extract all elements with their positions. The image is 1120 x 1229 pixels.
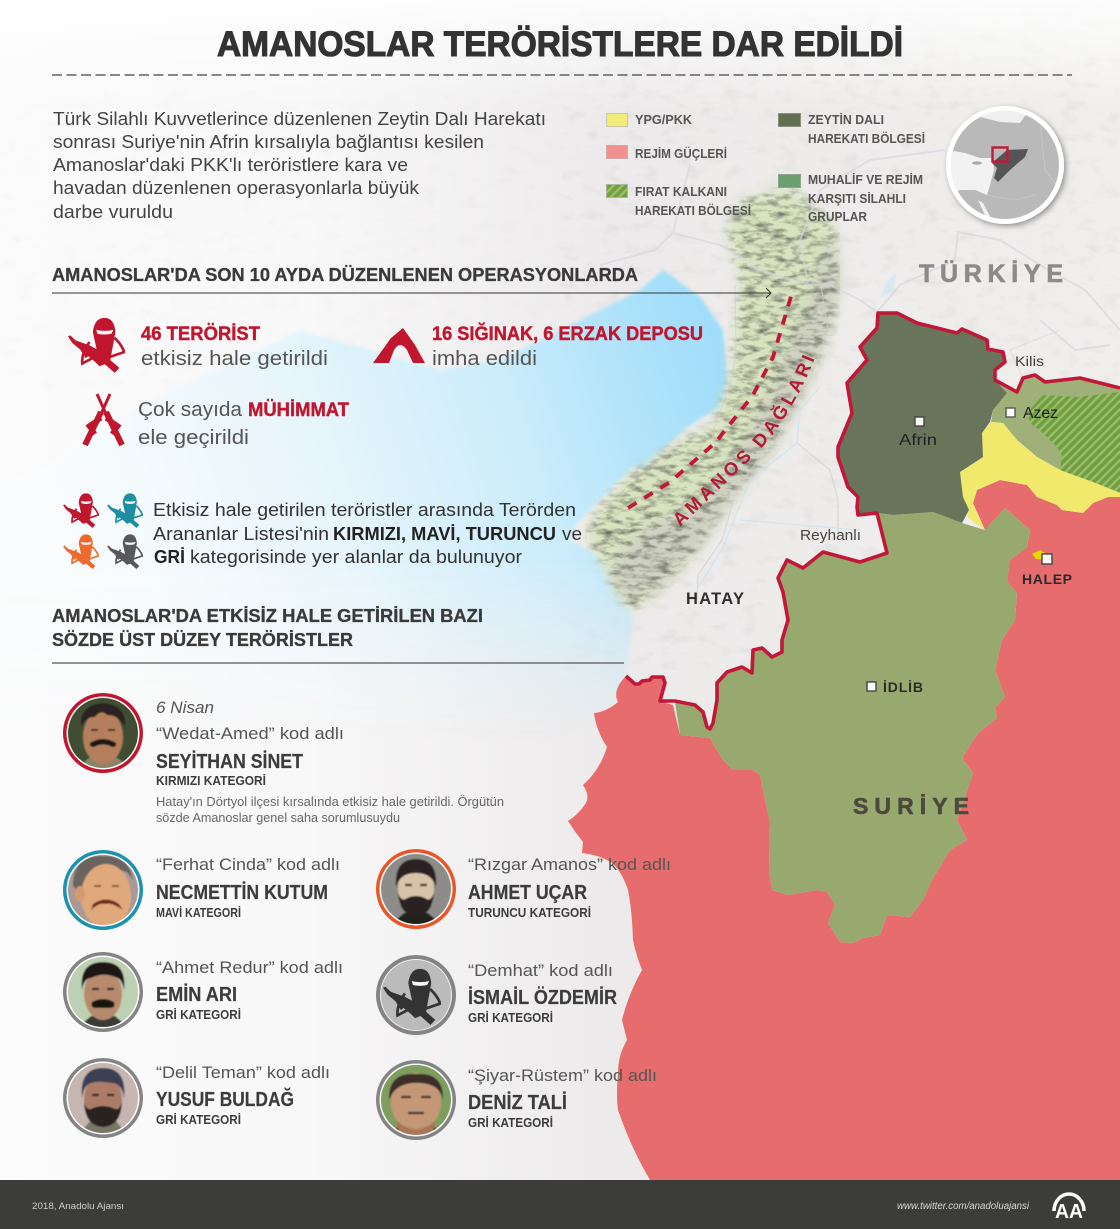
inset locator globe — [945, 105, 1065, 225]
wanted list note: kategorisinde yer alanlar da bulunuyor — [190, 547, 522, 567]
wanted list note: ve — [562, 524, 582, 544]
person: Necmettin Kutum: MAVİ KATEGORİ — [156, 905, 241, 920]
icons: wanted list categories — [63, 493, 143, 569]
person: İsmail Özdemir: GRİ KATEGORİ — [468, 1010, 553, 1025]
intro text: darbe vuruldu — [53, 202, 173, 222]
label: Suriye: SURİYE — [853, 793, 969, 819]
person: Yusuf Buldağ: “Delil Teman” kod adlı — [156, 1063, 330, 1082]
region: opposition groups — [675, 508, 1030, 943]
small yellow area near Aleppo — [1032, 550, 1045, 560]
portrait placeholder — [376, 955, 456, 1035]
portrait — [63, 850, 143, 930]
portrait — [376, 849, 456, 929]
heading: operations in the last 10 months — [52, 265, 771, 298]
person: Emin Arı: EMİN ARI — [156, 983, 237, 1006]
label: Reyhanlı: Reyhanlı — [800, 528, 861, 544]
legend: Euphrates Shield: FIRAT KALKANI — [635, 184, 727, 199]
person: Deniz Tali: “Şiyar-Rüstem” kod adlı — [468, 1066, 657, 1085]
person: Seyithan Sinet: “Wedat-Amed” kod adlı — [156, 724, 344, 743]
map labels — [674, 259, 1072, 819]
heading: senior terrorists — [52, 606, 624, 663]
icon: armed fighter — [68, 318, 124, 373]
person: Ahmet Uçar: “Rızgar Amanos” kod adlı — [468, 855, 671, 874]
person: Emin Arı: GRİ KATEGORİ — [156, 1007, 241, 1022]
label: Halep: HALEP — [1022, 571, 1072, 587]
stat: 16 shelters: 16 SIĞINAK, 6 ERZAK DEPOSU — [432, 323, 703, 345]
person: Seyithan Sinet: SEYİTHAN SİNET — [156, 750, 303, 773]
legend: opposition groups — [778, 172, 923, 224]
icon: crossed rifles — [85, 394, 122, 445]
legend: opposition groups: MUHALİF VE REJİM — [808, 172, 923, 187]
person: Necmettin Kutum: “Ferhat Cinda” kod adlı — [156, 855, 340, 874]
legend: regime forces — [606, 146, 727, 161]
person: Necmettin Kutum — [63, 850, 340, 930]
title: AMANOSLAR TERÖRİSTLERE DAR EDİLDİ — [217, 25, 903, 64]
region: Euphrates Shield hatch — [1027, 392, 1120, 492]
stat: ammunition: ele geçirildi — [138, 427, 249, 449]
map regions — [568, 293, 1120, 1180]
stat: 16 shelters — [373, 323, 703, 370]
label: Amanos Dağları — [680, 333, 824, 527]
heading: senior terrorists: SÖZDE ÜST DÜZEY TERÖRİSTLER — [52, 630, 353, 650]
legend: regime forces: REJİM GÜÇLERİ — [635, 146, 727, 161]
person: Ahmet Uçar: AHMET UÇAR — [468, 882, 587, 904]
map labels: AMANOS DAĞLARI — [674, 354, 814, 526]
person: Deniz Tali — [376, 1060, 657, 1140]
person: Yusuf Buldağ: GRİ KATEGORİ — [156, 1112, 241, 1127]
label: Afrin: Afrin — [899, 432, 937, 449]
heading: senior terrorists: AMANOSLAR'DA ETKİSİZ HALE GETİRİLEN BAZI — [52, 606, 483, 626]
label: Azez: Azez — [1023, 405, 1058, 422]
region: Olive Branch — [838, 313, 1007, 523]
portrait — [63, 693, 143, 773]
person: Seyithan Sinet: Hatay'ın Dörtyol ilçesi kırsalında etkisiz hale getirildi. Örgütün — [156, 795, 504, 809]
person: Deniz Tali: GRİ KATEGORİ — [468, 1115, 553, 1130]
person: Seyithan Sinet: KIRMIZI KATEGORİ — [156, 773, 266, 788]
person: Seyithan Sinet: 6 Nisan — [156, 698, 214, 717]
legend — [606, 112, 925, 224]
legend: Olive Branch: HAREKATI BÖLGESİ — [808, 131, 925, 146]
legend: opposition groups: GRUPLAR — [808, 209, 868, 224]
stat: 46 terrorists: etkisiz hale getirildi — [141, 348, 328, 370]
region: north opposition — [991, 375, 1120, 495]
person: İsmail Özdemir: “Demhat” kod adlı — [468, 961, 613, 980]
wanted list note: KIRMIZI, MAVİ, TURUNCU — [333, 524, 556, 544]
intro text — [53, 109, 546, 222]
footer bar: www.twitter.com/anadoluajansi — [897, 1201, 1030, 1212]
stat: 16 shelters: imha edildi — [432, 348, 537, 370]
person: Necmettin Kutum: NECMETTİN KUTUM — [156, 881, 328, 904]
person: İsmail Özdemir — [376, 955, 618, 1035]
stat: ammunition: Çok sayıda — [138, 399, 243, 421]
person: Yusuf Buldağ — [63, 1058, 330, 1138]
stat: 46 terrorists — [68, 318, 328, 373]
intro text: Türk Silahlı Kuvvetlerince düzenlenen Zeytin Dalı Harekatı — [53, 109, 546, 129]
legend: Euphrates Shield — [606, 184, 751, 218]
label: Halep — [1022, 554, 1072, 587]
icon: cave — [373, 328, 425, 363]
legend: Olive Branch: ZEYTİN DALI — [808, 112, 884, 127]
terrain: Amanos mountains — [585, 187, 840, 610]
portrait — [376, 1060, 456, 1140]
person: Seyithan Sinet — [63, 693, 504, 825]
person: Ahmet Uçar: TURUNCU KATEGORİ — [468, 905, 591, 920]
wanted list note: GRİ — [154, 547, 185, 567]
label: Afrin — [899, 417, 937, 449]
intro text: havadan düzenlenen operasyonlarla büyük — [53, 178, 420, 198]
label: Türkiye: TÜRKİYE — [919, 259, 1063, 288]
person: İsmail Özdemir: İSMAİL ÖZDEMİR — [468, 986, 618, 1009]
legend: YPG/PKK: YPG/PKK — [635, 112, 693, 127]
logo: Anadolu Agency: AA — [1055, 1201, 1083, 1223]
portrait — [63, 952, 143, 1032]
person: Deniz Tali: DENİZ TALİ — [468, 1091, 567, 1114]
label: Kilis: Kilis — [1015, 353, 1044, 369]
person: Emin Arı: “Ahmet Redur” kod adlı — [156, 958, 343, 977]
wanted list note: Arananlar Listesi'nin — [153, 524, 329, 544]
legend: Olive Branch — [778, 112, 925, 146]
label: Hatay: HATAY — [686, 590, 744, 608]
region: regime forces — [568, 480, 1120, 1180]
stat: ammunition — [85, 394, 349, 449]
label: İdlib: İDLİB — [883, 679, 923, 695]
heading: operations in the last 10 months: AMANOSLAR'DA SON 10 AYDA DÜZENLENEN OPERASYONLARDA — [52, 265, 638, 285]
label: Azez — [1006, 405, 1058, 422]
person: Emin Arı — [63, 952, 343, 1032]
wanted list note — [63, 493, 582, 569]
footer bar — [0, 1180, 1120, 1229]
dashed line: Amanos mountains — [628, 293, 792, 508]
stat: 46 terrorists: 46 TERÖRİST — [141, 324, 260, 345]
person: Ahmet Uçar — [376, 849, 671, 929]
legend: YPG/PKK — [606, 112, 693, 127]
legend: Euphrates Shield: HAREKATI BÖLGESİ — [635, 203, 751, 218]
portrait — [63, 1058, 143, 1138]
footer bar: 2018, Anadolu Ajansı — [32, 1201, 124, 1212]
intro text: Amanoslar'daki PKK'lı teröristlere kara ve — [53, 155, 408, 175]
person: Yusuf Buldağ: YUSUF BULDAĞ — [156, 1087, 294, 1111]
legend: opposition groups: KARŞITI SİLAHLI — [808, 191, 906, 206]
lines: provinces, roads, rivers — [600, 150, 1120, 600]
person: Seyithan Sinet: sözde Amanoslar genel saha sorumlusuydu — [156, 811, 400, 825]
border: Turkey-Syria — [626, 313, 1120, 729]
intro text: sonrası Suriye'nin Afrin kırsalıyla bağlantısı kesilen — [53, 132, 484, 152]
wanted list note: Etkisiz hale getirilen teröristler arasında Terörden — [153, 500, 576, 520]
sea: gulf of Iskenderun — [138, 269, 729, 698]
stat: ammunition: MÜHİMMAT — [248, 400, 349, 421]
region: YPG/PKK — [960, 422, 1120, 530]
